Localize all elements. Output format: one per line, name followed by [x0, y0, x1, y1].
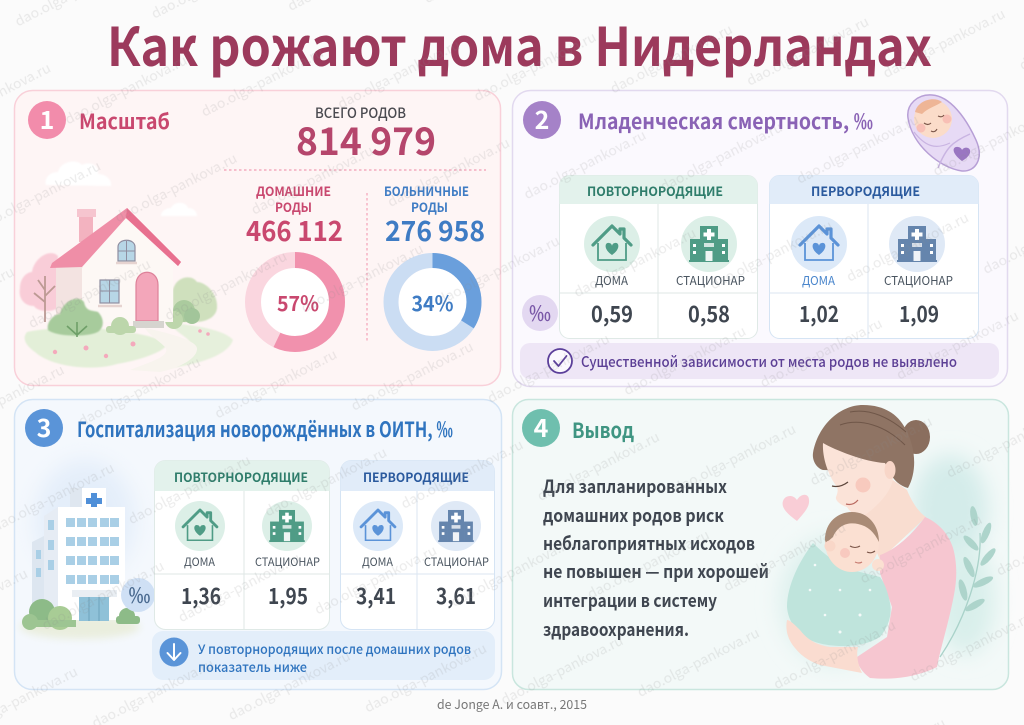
unit badge — [121, 578, 155, 612]
leaves — [940, 506, 998, 657]
cell: hospital — [676, 216, 745, 329]
unit badge — [522, 295, 558, 331]
heading: NICU admission: Госпитализация новорождённых в ОИТН, ‰ — [77, 414, 453, 444]
callout: lower rate: показатель ниже — [198, 657, 307, 676]
illustration: house — [20, 161, 233, 372]
hospital births: БОЛЬНИЧНЫЕ — [384, 181, 469, 200]
total births: 814 979 — [296, 111, 436, 166]
donut: hospital 34% — [391, 260, 474, 344]
cell: home: ДОМА — [362, 554, 393, 570]
header: multiparous — [154, 460, 330, 491]
roof — [50, 208, 181, 268]
donut: hospital 34%: 34% — [412, 288, 454, 318]
header: primiparous — [770, 176, 978, 204]
door — [136, 272, 158, 321]
table: primiparous — [769, 176, 978, 338]
home births: ДОМАШНИЕ — [256, 181, 331, 200]
panel: conclusion — [512, 400, 1008, 690]
badge 2: 2 — [535, 101, 549, 137]
cell: home: 0,59 — [591, 297, 633, 329]
cell: home: 1,02 — [799, 297, 839, 329]
text: conclusion: Для запланированных — [543, 473, 727, 499]
hospital births: РОДЫ — [411, 197, 448, 216]
table: multiparous — [559, 176, 758, 338]
walls — [56, 267, 84, 320]
swaddled baby — [787, 512, 891, 646]
cell: hospital: 3,61 — [436, 579, 476, 611]
cell: hospital — [884, 216, 953, 329]
callout: lower rate — [152, 631, 495, 680]
hospital births: 276 958 — [385, 210, 485, 250]
right bushes — [173, 277, 217, 322]
badge 1: 1 — [40, 101, 54, 137]
heart — [783, 495, 809, 521]
lawn — [25, 328, 168, 368]
badge 2 — [523, 101, 561, 139]
bun — [902, 420, 930, 454]
sweater — [857, 517, 956, 679]
cell: home: ДОМА — [184, 554, 215, 570]
header: primiparous: ПЕРВОРОДЯЩИЕ — [811, 181, 920, 200]
badge 3 — [25, 409, 63, 447]
text: conclusion: неблагоприятных исходов — [543, 530, 755, 556]
cell: hospital: 0,58 — [688, 297, 730, 329]
text: conclusion: домашних родов риск — [543, 502, 724, 528]
panel: NICU admission — [14, 400, 502, 690]
text: conclusion — [543, 473, 769, 642]
panel: scale — [14, 90, 500, 386]
header: multiparous: ПОВТОРНОРОДЯЩИЕ — [174, 467, 308, 486]
tree — [20, 253, 58, 311]
home births: РОДЫ — [275, 197, 312, 216]
table: primiparous — [340, 460, 494, 630]
panel: infant mortality — [512, 90, 1008, 386]
header: multiparous — [560, 176, 758, 204]
cell: home — [353, 501, 403, 611]
unit badge: ‰ — [128, 580, 150, 610]
source note: de Jonge A. и соавт., 2015 — [437, 694, 587, 713]
badge 3: 3 — [37, 409, 51, 445]
header: primiparous: ПЕРВОРОДЯЩИЕ — [363, 467, 469, 486]
cell: hospital: 1,09 — [899, 297, 939, 329]
heading: conclusion: Вывод — [572, 415, 634, 445]
table: multiparous — [154, 460, 330, 630]
header: multiparous: ПОВТОРНОРОДЯЩИЕ — [587, 181, 723, 200]
mother's hand — [786, 620, 862, 673]
neck and chest — [862, 480, 926, 560]
cell: hospital — [424, 501, 489, 611]
donut: home 57% — [253, 260, 337, 344]
cell: home: ДОМА — [802, 272, 836, 289]
heading: scale: Масштаб — [79, 106, 170, 136]
illustration: hospital — [20, 460, 140, 639]
total births: ВСЕГО РОДОВ — [315, 103, 406, 123]
heading: infant mortality: Младенческая смертность, ‰ — [578, 106, 873, 136]
cell: home: 1,36 — [181, 579, 221, 611]
title: Как рожают дома в Нидерландах — [107, 6, 932, 82]
cell: hospital: СТАЦИОНАР — [676, 272, 745, 289]
donut: home 57%: 57% — [277, 288, 319, 318]
mother — [813, 405, 956, 679]
windows — [118, 240, 135, 261]
left bushes — [111, 317, 129, 335]
callout: lower rate: У повторнородящих после домашних родов — [198, 639, 471, 658]
callout: no dependency — [520, 343, 999, 379]
cell: hospital: 1,95 — [268, 579, 308, 611]
badge 4 — [522, 409, 560, 447]
unit badge: ‰ — [529, 298, 551, 328]
callout: no dependency: Существенной зависимости от места родов не выявлено — [581, 351, 957, 372]
text: conclusion: не повышен — при хорошей — [543, 558, 769, 584]
home births — [246, 181, 343, 250]
cell: home: 3,41 — [356, 579, 396, 611]
badge 4: 4 — [534, 409, 549, 445]
header: primiparous — [340, 460, 494, 491]
home births: 466 112 — [246, 210, 343, 250]
cell: hospital: СТАЦИОНАР — [884, 272, 953, 289]
chimney — [79, 212, 93, 242]
badge 1 — [28, 101, 66, 139]
face — [823, 443, 893, 517]
cell: home — [175, 501, 225, 611]
cell: home — [791, 216, 847, 329]
text: conclusion: здравоохранения. — [543, 616, 689, 642]
cell: home — [584, 216, 640, 329]
cell: hospital — [255, 501, 320, 611]
illustration: swaddled baby — [908, 95, 979, 171]
text: conclusion: интеграции в систему — [543, 587, 718, 613]
hospital births — [384, 181, 485, 250]
flowers — [53, 329, 210, 358]
cell: home: ДОМА — [595, 272, 629, 289]
cell: hospital: СТАЦИОНАР — [255, 554, 320, 570]
illustration: mother and baby — [780, 405, 998, 679]
hair — [813, 405, 914, 488]
cell: hospital: СТАЦИОНАР — [424, 554, 489, 570]
